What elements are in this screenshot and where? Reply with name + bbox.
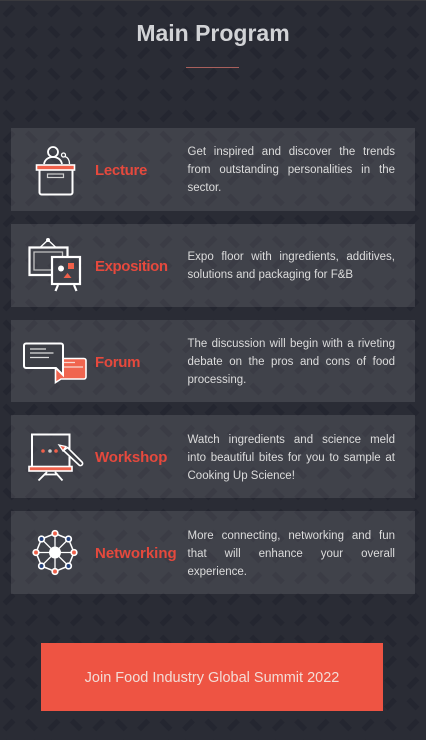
text: workshop description: Cooking Up Science! bbox=[188, 470, 295, 482]
button: join summit: Join Food Industry Global Summit 2022 bbox=[85, 670, 339, 686]
text: networking description: experience. bbox=[188, 566, 247, 578]
text: workshop description bbox=[188, 434, 395, 482]
text: forum description bbox=[188, 338, 395, 386]
text: exposition description bbox=[188, 251, 395, 281]
text: workshop description: into beautiful bites for you to sample at bbox=[188, 452, 395, 464]
icon: networking nodes bbox=[33, 531, 77, 574]
button: join summit bbox=[41, 643, 383, 711]
text: forum description: processing. bbox=[188, 374, 246, 386]
panel: forum bbox=[11, 320, 415, 402]
text: networking description: More connecting, networking and fun bbox=[188, 530, 395, 542]
text: workshop description: Watch ingredients and science meld bbox=[188, 434, 395, 446]
icon: workshop board and pen bbox=[29, 434, 83, 480]
panel: workshop bbox=[11, 415, 415, 498]
text: lecture description: from outstanding personalities in the bbox=[188, 164, 395, 176]
text: exposition description: Expo floor with ingredients, additives, bbox=[188, 251, 395, 263]
label: workshop: Workshop bbox=[95, 449, 167, 466]
title: Main Program bbox=[136, 20, 290, 46]
text: exposition description: solutions and packaging for F&B bbox=[188, 269, 353, 281]
text: lecture description: Get inspired and discover the trends bbox=[188, 146, 395, 158]
panel: networking bbox=[11, 511, 415, 594]
label: exposition: Exposition bbox=[95, 258, 168, 274]
text: lecture description bbox=[188, 146, 395, 194]
label: forum: Forum bbox=[95, 354, 140, 370]
text: forum description: The discussion will begin with a riveting bbox=[188, 338, 395, 350]
icon: exposition boards bbox=[30, 238, 80, 291]
label: lecture: Lecture bbox=[95, 162, 147, 179]
label: networking: Networking bbox=[95, 545, 177, 562]
panel: exposition bbox=[11, 224, 415, 307]
icon: forum speech bubbles bbox=[24, 344, 86, 382]
icon: lecture podium bbox=[36, 147, 74, 194]
text: forum description: debate on the pros and cons of food bbox=[188, 356, 395, 368]
text: lecture description: sector. bbox=[188, 182, 221, 194]
text: networking description bbox=[188, 530, 395, 578]
panel: lecture bbox=[11, 128, 415, 211]
text: networking description: that will enhance your overall bbox=[188, 548, 395, 560]
